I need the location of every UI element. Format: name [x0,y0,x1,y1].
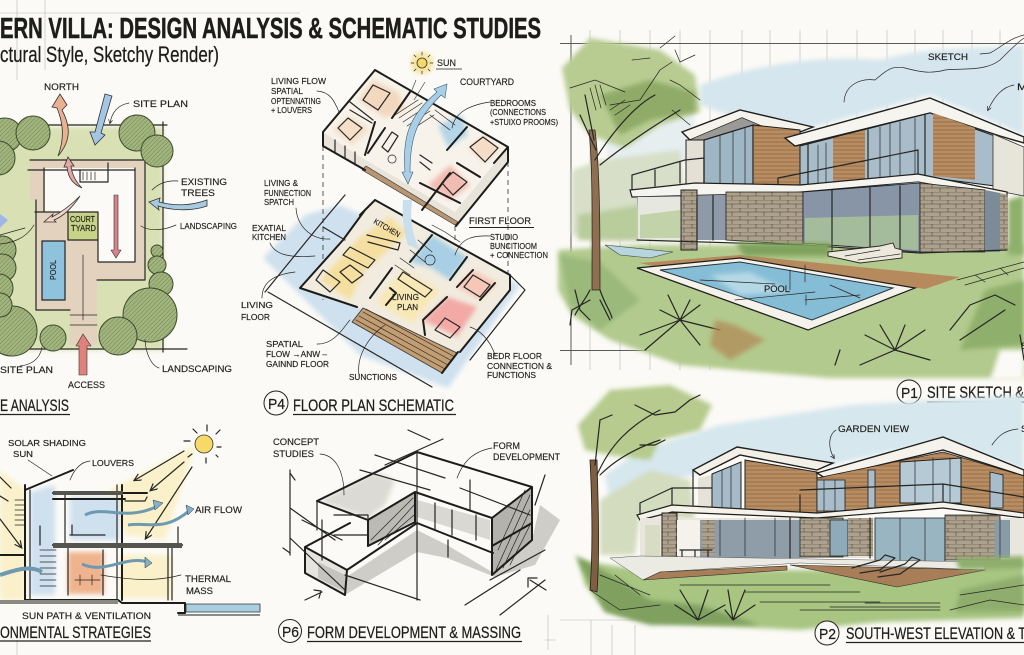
label: site plan lower: SITE PLAN [0,365,53,376]
canopy shade [600,80,695,135]
air flow arrows [0,500,194,575]
right bushes [960,195,1024,350]
label: studio: BUNCITIOOM [490,242,537,251]
site lawn [0,127,163,350]
label: thermal mass: THERMAL [185,574,231,585]
wood deck right [790,565,985,587]
left roof [693,447,833,475]
right upper wall [800,452,1024,513]
leader lines [262,80,495,375]
label: kitchen note [252,224,287,242]
label: north: NORTH [44,82,79,93]
label: existing trees: EXISTING [181,177,227,188]
label: landscaping lower: LANDSCAPING [162,364,232,375]
stepping stones [957,262,1024,285]
heading: P4 floor plan schematic: P4 [268,396,285,413]
heading: site analysis: E ANALYSIS [0,396,69,415]
label: site plan: SITE PLAN [133,99,188,110]
yellow sun wash [0,445,195,600]
arrow: blue inlet [0,214,8,228]
label: sketch [928,35,1024,63]
label: spatial flow: FLOW →ANW – [266,350,328,359]
label: bedroom floor: CONNECTION & [487,362,553,371]
label: form development: FORM [493,441,520,452]
leader lines [28,460,181,580]
title: ERN VILLA: DESIGN ANALYSIS & SCHEMATIC STUDIES [0,13,541,45]
label: form development [493,441,560,463]
label: living and function: LIVING & [264,179,299,188]
label: concept studies [273,437,319,460]
label: studio: + CONNECTION [490,251,548,260]
tree [590,395,700,592]
label: living flow: SPATIAL [271,87,304,96]
sun rays [0,451,192,547]
label: studio: STUDIO [490,233,518,242]
grass patches [560,255,640,330]
sky behind [605,90,700,170]
label: courtyard: COURTYARD [460,77,514,88]
roof shading [320,472,395,518]
label: air flow: AIR FLOW [195,505,242,516]
label: sketch: SKETCH [928,52,968,63]
heading: P1 site sketch [897,380,1024,404]
sky wash [700,45,1024,135]
arrow: blue wind [90,94,112,145]
label: living flow: LIVING FLOW [271,77,326,86]
heading: P6 form development and massing [278,620,522,642]
label: bedrooms: (CONNECTIONS [490,108,546,117]
label: garden view [830,424,909,458]
label: living floor: FLOOR [241,313,270,322]
ground floor plan [265,195,525,387]
label: living floor: LIVING [241,301,273,310]
sky wash [605,395,1024,510]
label: living flow [271,77,326,115]
label: solar shading sun: SOLAR SHADING [8,439,86,448]
balcony rail [632,158,704,190]
left roof [682,110,813,140]
side pool [605,245,673,258]
pool: POOL [49,260,58,280]
tree canopy [578,385,712,460]
label: existing trees [181,177,227,199]
label: living flow: + LOUVERS [271,106,312,115]
panel: form development and massing [273,430,560,642]
label: living and function: FUNNECTION [264,189,311,198]
label: solar shading sun: SUN [13,450,33,459]
label: sun: SUN [437,58,456,69]
label: functions: SUNCTIONS [349,373,397,382]
label: living plan: PLAN [397,303,418,312]
label: concept studies: CONCEPT [273,437,319,448]
lower bushes [578,205,640,240]
right upper wall [778,113,995,190]
panel: site analysis [0,82,237,415]
arrow: diagonal [44,196,80,222]
blue wash [263,205,520,388]
planting strokes [570,290,1024,365]
label: bedroom floor: FUNCTIONS [487,371,536,380]
sun loungers [852,555,920,577]
label: studio [490,233,548,260]
lounge chairs [828,243,902,263]
distant planting [572,150,690,240]
arrow: small pink [64,157,82,188]
panel: floor plan schematic [241,52,558,415]
slab [637,502,1024,520]
label: bedrooms [490,99,558,127]
distant planting [600,470,695,555]
wood deck [640,255,960,289]
swimming pool [637,258,915,330]
label: solar shading sun [8,439,86,459]
cool air wash [30,485,120,595]
label: clipped note [988,82,1024,110]
label: kitchen: KITCHEN [372,217,402,239]
panel: P2 south-west elevation [575,385,1024,645]
label: kitchen note: KITCHEN [252,233,286,242]
leader lines [320,448,492,495]
thermal mass [68,552,104,594]
label: sun path and ventilation: SUN PATH & VENTILATION [22,611,151,622]
ground floor [637,182,1008,253]
balcony rail [640,470,712,515]
heading: P4 floor plan schematic: FLOOR PLAN SCHEMATIC [293,396,454,415]
heading: environmental strategies: ONMENTAL STRATEGIES [0,623,151,642]
existing trees [0,115,177,356]
tree trunk and branches [570,36,700,318]
slab [630,174,1007,198]
arrow: blue vertical flow [402,84,447,184]
ground floor [640,513,1024,567]
label: thermal mass: MASS [186,586,213,597]
courtyard label: COURT [70,215,95,224]
right roof [817,437,1024,478]
icon: sun [411,52,433,74]
lawn [578,560,1024,630]
dark planting [575,555,760,625]
panel: P1 site sketch [558,30,1024,404]
label: bedroom floor: BEDR FLOOR [487,352,542,361]
label: bedroom floor [487,352,553,380]
plants and lawn strokes [590,575,1024,620]
heading: P6 form development and massing: FORM DEVELOPMENT & MASSING [307,623,521,642]
arrow: north [52,94,68,156]
label: living plan [392,293,419,312]
label: living and function [264,179,311,207]
label: form development: DEVELOPMENT [493,452,560,463]
terrace slab [610,556,985,580]
icon: sun [184,425,221,463]
grid lines [590,30,1000,370]
pool [42,241,65,300]
label: thermal mass [185,574,231,597]
label: living floor [241,301,273,322]
lawn [558,245,1024,378]
panel: environmental strategies [0,425,260,642]
label: first floor: FIRST FLOOR [469,216,531,227]
cast shadows [345,505,560,595]
site paths and building [0,122,187,352]
label: access: ACCESS [68,380,105,391]
low hedge [955,556,1024,570]
lower edge clearing [990,350,1024,380]
label: bedrooms: BEDROOMS [490,99,536,108]
left upper wall [698,460,817,513]
label: louvers: LOUVERS [92,459,134,468]
heading: P1 site sketch: P1 [901,385,918,402]
arrow: blue lower flow [403,200,420,250]
arrow: blue side wind [149,198,207,210]
label: spatial flow [266,340,329,369]
label: kitchen note: EXATIAL [252,224,287,233]
section structure [0,470,185,613]
label: spatial flow: GAINND FLOOR [266,360,329,369]
massing model [283,430,546,615]
subtitle: ctural Style, Sketchy Render) [0,42,219,67]
tree canopy [562,38,700,148]
shallow pool [178,604,260,615]
wood deck left [643,566,787,580]
arrow: pink vertical [111,195,121,258]
heading: P2 south-west elevation: P2 [819,626,836,643]
right roof [785,98,1024,146]
left upper wall [686,125,800,185]
label: existing trees: TREES [181,188,215,199]
label: spatial flow: SPATIAL [266,340,304,349]
label: clipped note [992,424,1024,445]
arrow: access [76,334,91,375]
label: living plan: LIVING [392,293,419,302]
label: garden view: GARDEN VIEW [838,424,909,435]
label: living flow: OPTENNATING [271,97,321,106]
concrete side wall [993,134,1024,196]
label: pool: POOL [764,284,790,295]
first floor plan [323,70,508,300]
label: bedrooms: +STUIXO PROOMS) [490,118,558,127]
courtyard label: TYARD [71,224,96,233]
cloud outline [844,38,1024,102]
heading: P4 floor plan schematic [264,391,456,415]
green bed [735,243,830,256]
label: living and function: SPATCH [264,198,294,207]
label: concept studies: STUDIES [273,449,314,460]
heading: P2 south-west elevation [815,621,1024,645]
site plan leader lines [0,103,178,368]
heading: P6 form development and massing: P6 [282,624,299,641]
courtyard label [70,215,96,233]
label: landscaping: LANDSCAPING [180,222,237,231]
